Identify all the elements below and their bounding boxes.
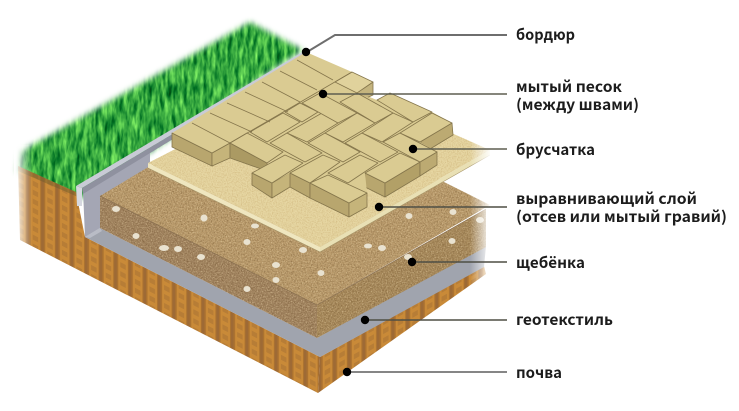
crushed stone layer (100, 130, 490, 338)
leader: брусчатка (409, 145, 507, 153)
paving bricks (172, 52, 453, 217)
border row joints (172, 60, 352, 153)
leveling sand layer (148, 75, 490, 252)
leader: щебёнка (408, 258, 507, 266)
soil layer (18, 166, 486, 393)
geotextile layer (83, 152, 486, 357)
leader: выравнивающий слой (375, 203, 507, 211)
stones (112, 206, 484, 292)
label: выравнивающий слой: выравнивающий слой (516, 188, 697, 209)
leader: почва (343, 368, 507, 376)
label: мытый песок: мытый песок (516, 76, 622, 97)
label: выравнивающий слой: (отсев или мытый гравий) (516, 206, 727, 227)
leader: геотекстиль (361, 316, 507, 324)
label: геотекстиль: геотекстиль (516, 309, 613, 330)
leader: мытый песок (319, 90, 507, 98)
leader: бордюр (302, 35, 507, 56)
grass (17, 22, 303, 200)
soft fade behind the paving (345, 40, 530, 132)
label: брусчатка: брусчатка (516, 139, 595, 160)
label: почва: почва (516, 362, 562, 383)
curb (76, 50, 309, 206)
label: бордюр: бордюр (516, 24, 575, 45)
herringbone bricks (230, 72, 452, 203)
brick side faces (172, 82, 453, 217)
label: мытый песок: (между швами) (516, 94, 639, 115)
label: щебёнка: щебёнка (516, 252, 585, 273)
edge fades (14, 120, 506, 290)
brick top base (172, 52, 452, 203)
